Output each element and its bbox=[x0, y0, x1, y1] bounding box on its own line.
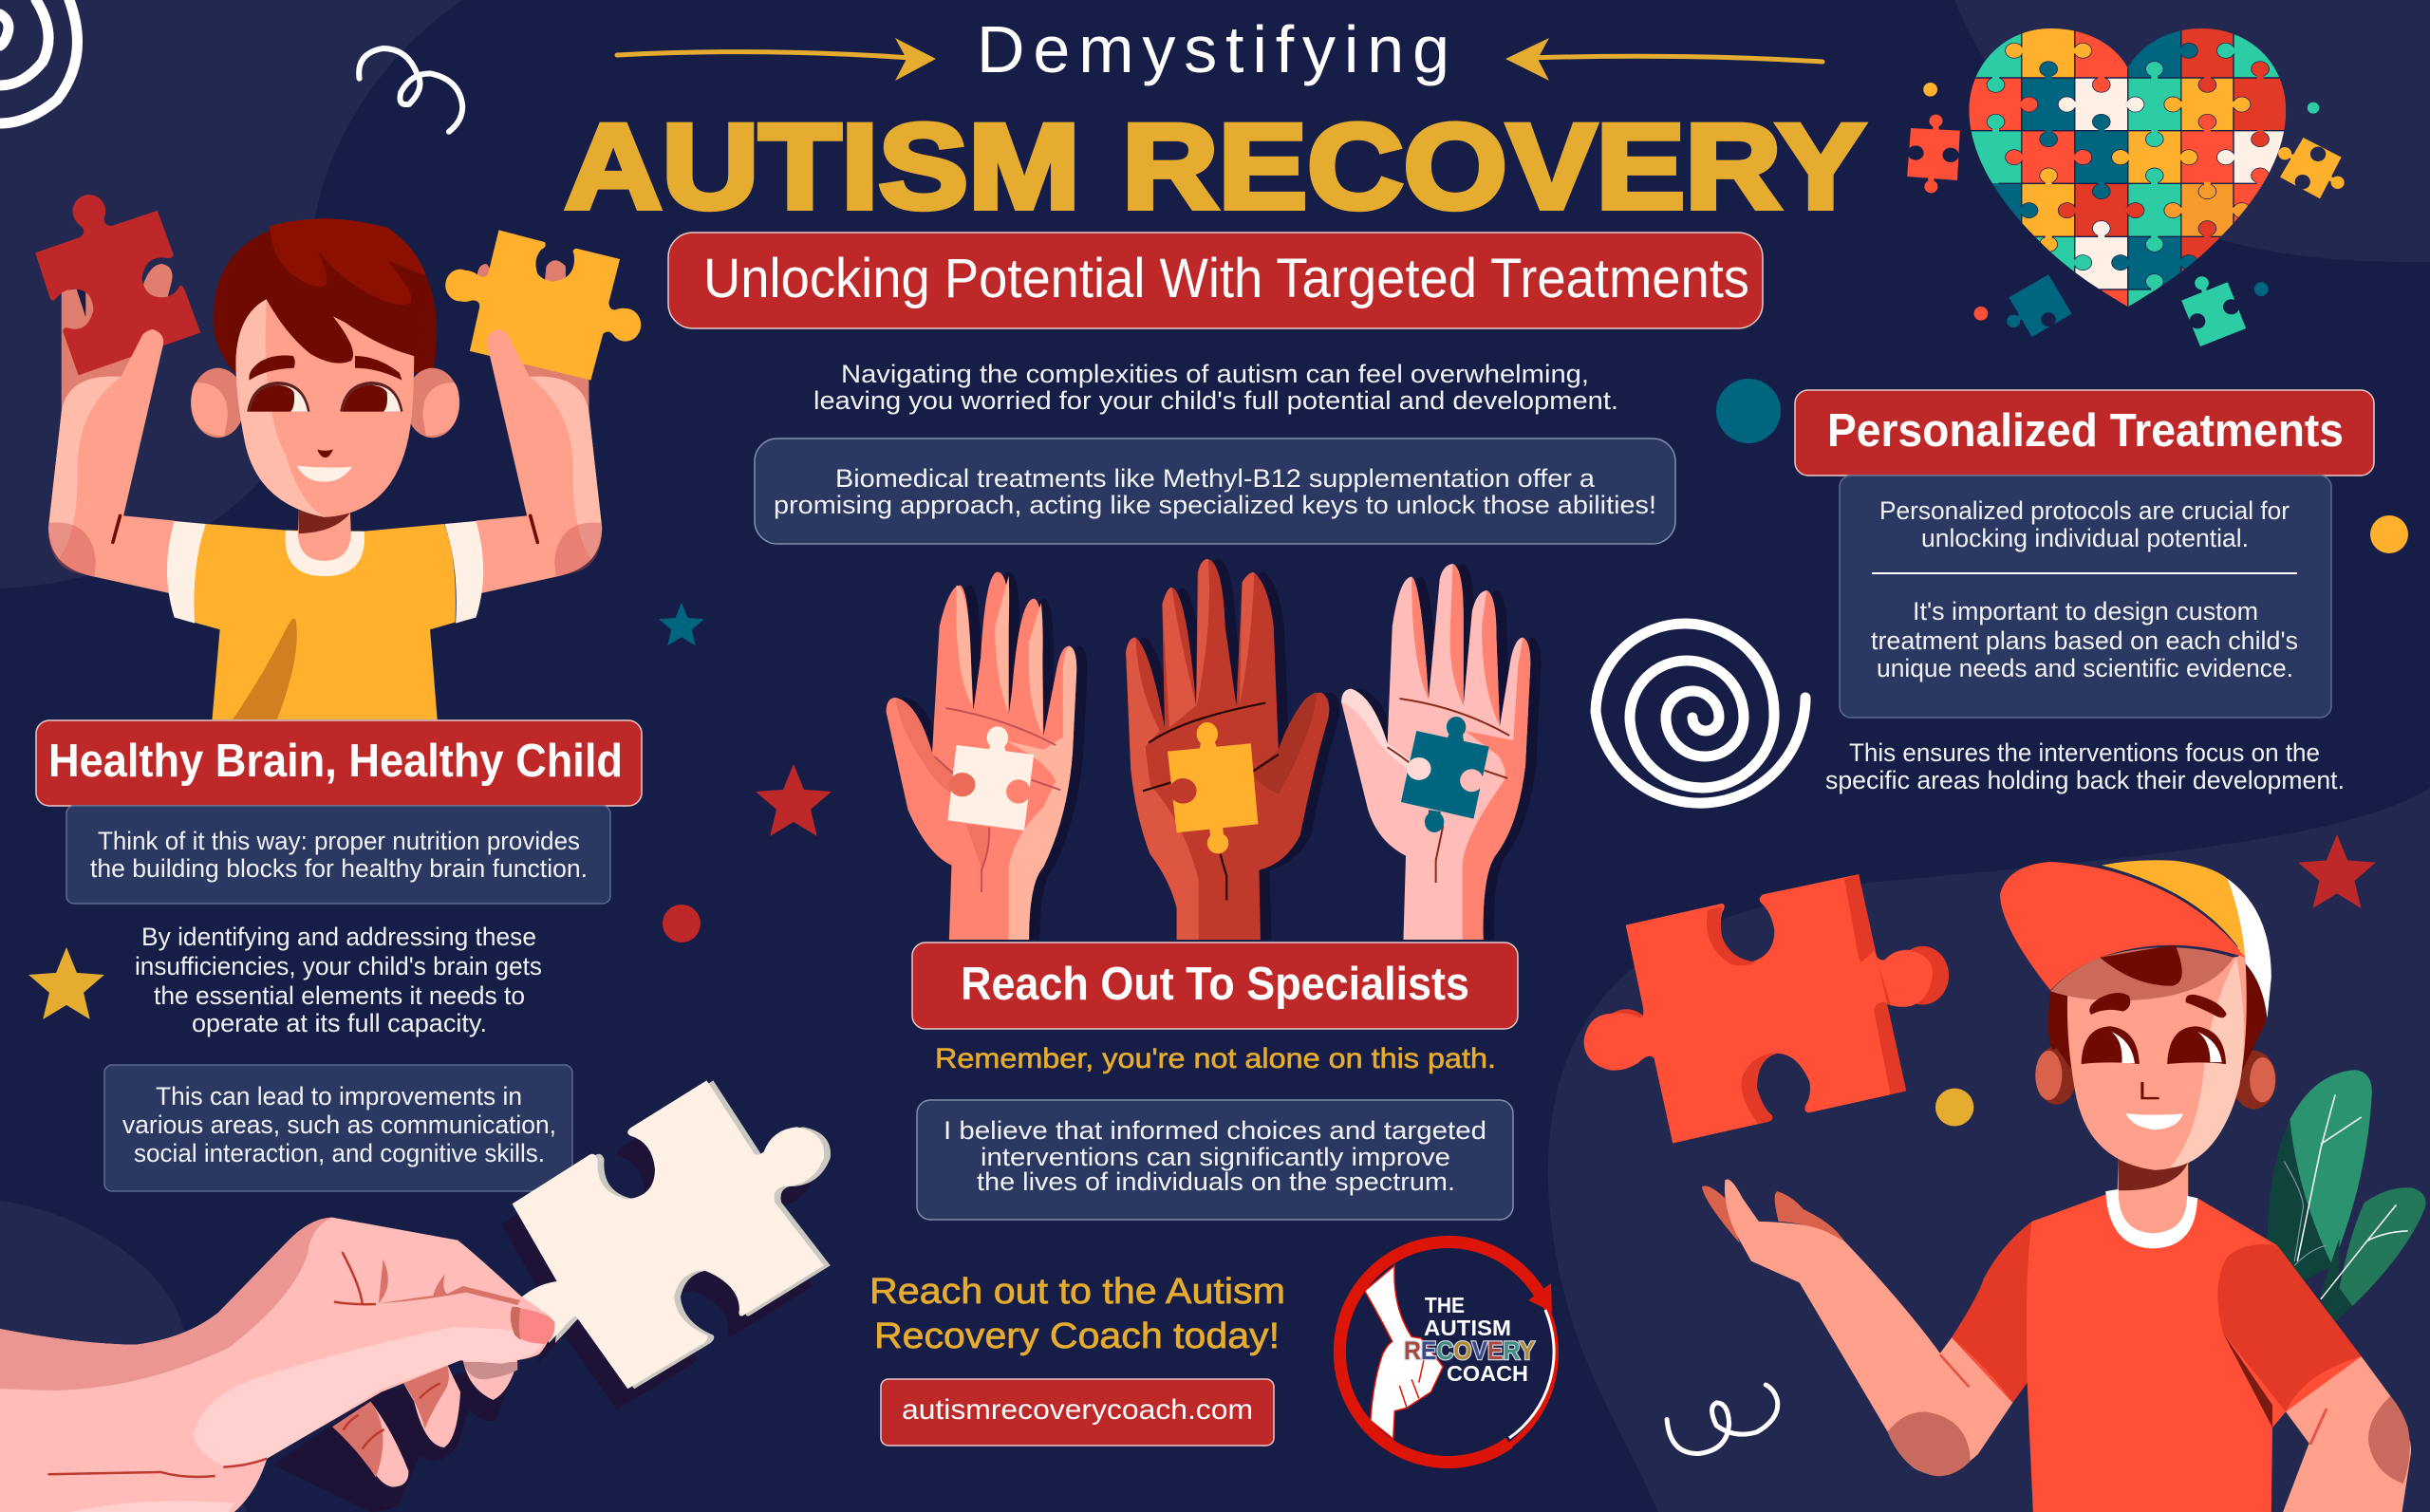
finger shadow bbox=[272, 1360, 517, 1512]
heading panel: Healthy Brain, Healthy Child bbox=[36, 720, 642, 806]
intro text: Navigating the complexities of autism can feel overwhelming, bbox=[841, 360, 1589, 388]
website button bbox=[881, 1379, 1274, 1446]
logo: The Autism Recovery Coach: RECOVERY bbox=[1404, 1336, 1535, 1365]
gold dot bbox=[1935, 1089, 1973, 1126]
panel: biomedical treatments: Biomedical treatments like Methyl-B12 supplementation offer a bbox=[835, 464, 1596, 493]
logo: The Autism Recovery Coach: THE bbox=[1425, 1293, 1465, 1317]
illustration: boy holding puzzle pieces bbox=[35, 195, 641, 719]
puzzle heart bbox=[1907, 28, 2345, 346]
text block: focus of interventions bbox=[1825, 738, 2345, 794]
call to action text bbox=[869, 1272, 1285, 1356]
heading panel: Reach Out To Specialists bbox=[912, 943, 1518, 1029]
text block: identifying insufficiencies: the essential elements it needs to bbox=[154, 981, 525, 1010]
loose puzzle piece: blue bbox=[2007, 274, 2072, 337]
decoration: gold circle bbox=[2370, 515, 2408, 553]
subtitle banner: Unlocking Potential With Targeted Treatments bbox=[703, 248, 1749, 309]
panel: improvements: social interaction, and cognitive skills. bbox=[134, 1139, 545, 1167]
yellow puzzle piece bbox=[445, 230, 641, 381]
text block: focus of interventions: specific areas holding back their development. bbox=[1825, 766, 2345, 794]
panel: nutrition: the building blocks for healthy brain function. bbox=[90, 854, 588, 883]
panel: improvements bbox=[104, 1065, 572, 1191]
floating puzzle piece bbox=[1584, 874, 1949, 1143]
head and cap bbox=[2000, 860, 2276, 1170]
website button: autismrecoverycoach.com bbox=[902, 1394, 1253, 1426]
loose puzzle piece: orange bbox=[1907, 115, 1960, 193]
title arrow left bbox=[617, 38, 936, 81]
heart tiles bbox=[1969, 28, 2286, 308]
hand three bbox=[1341, 564, 1541, 940]
subtitle banner bbox=[668, 233, 1763, 328]
panel: personalized protocols bbox=[1840, 476, 2331, 718]
text: Remember: Remember, you're not alone on this path. bbox=[935, 1043, 1496, 1074]
head bbox=[191, 218, 459, 517]
back fingers left bbox=[62, 289, 145, 417]
red puzzle piece bbox=[35, 195, 200, 375]
hand two bbox=[1126, 559, 1340, 940]
panel: nutrition: Think of it this way: proper nutrition provides bbox=[98, 827, 580, 855]
text block: identifying insufficiencies: By identifying and addressing these bbox=[141, 923, 536, 951]
logo: The Autism Recovery Coach bbox=[1339, 1241, 1556, 1462]
right forearm bbox=[2283, 1356, 2411, 1512]
text block: identifying insufficiencies bbox=[135, 923, 542, 1037]
logo: The Autism Recovery Coach: COACH bbox=[1447, 1361, 1528, 1386]
decoration: red circle bbox=[663, 905, 701, 943]
panel: informed choices: interventions can significantly improve bbox=[981, 1143, 1450, 1171]
title: Demystifying: Demystifying bbox=[977, 12, 1449, 86]
call to action text: Recovery Coach today! bbox=[874, 1316, 1280, 1356]
heading panel: Personalized Treatments: Personalized Treatments bbox=[1827, 405, 2344, 457]
red shirt bbox=[1952, 1195, 2362, 1512]
back fingers right bbox=[509, 359, 589, 417]
panel: personalized protocols: treatment plans based on each child's bbox=[1871, 626, 2298, 655]
neck and collar bbox=[286, 509, 364, 576]
hand one bbox=[887, 572, 1087, 940]
star: gold bbox=[28, 947, 104, 1019]
panel: biomedical treatments bbox=[755, 439, 1675, 544]
heading panel: Healthy Brain, Healthy Child: Healthy Brain, Healthy Child bbox=[48, 736, 623, 787]
intro text bbox=[813, 360, 1618, 415]
decoration: top squiggle bbox=[359, 48, 462, 132]
title arrow right bbox=[1505, 38, 1822, 81]
yellow shirt bbox=[167, 521, 483, 719]
left arm bbox=[1702, 1180, 2012, 1476]
panel: informed choices: the lives of individuals on the spectrum. bbox=[977, 1167, 1455, 1196]
loose puzzle piece: gold bbox=[2278, 138, 2345, 198]
puzzle piece bbox=[501, 1080, 831, 1409]
decoration: corner spiral bbox=[0, 0, 77, 123]
panel: improvements: various areas, such as communication, bbox=[122, 1111, 556, 1139]
panel: informed choices bbox=[917, 1100, 1513, 1220]
star: teal bbox=[659, 603, 704, 645]
heading panel: Personalized Treatments bbox=[1795, 390, 2374, 476]
star: red right bbox=[2298, 834, 2376, 908]
fingers bbox=[332, 1360, 517, 1487]
panel: personalized protocols: unique needs and scientific evidence. bbox=[1877, 654, 2293, 682]
star: red bbox=[756, 764, 832, 836]
decoration: teal circle bbox=[1716, 379, 1781, 443]
right arm bbox=[477, 329, 602, 593]
illustration: boy in cap with floating puzzle piece bbox=[1584, 860, 2426, 1512]
text block: identifying insufficiencies: insufficiencies, your child's brain gets bbox=[135, 952, 542, 980]
panel: biomedical treatments: promising approach, acting like specialized keys to unlock those abilities! bbox=[774, 491, 1656, 519]
panel: personalized protocols: It's important to design custom bbox=[1913, 597, 2258, 625]
leaves bbox=[2268, 1070, 2426, 1324]
panel: personalized protocols: Personalized protocols are crucial for bbox=[1879, 496, 2290, 525]
title: Autism Recovery bbox=[565, 99, 1865, 233]
neck and collar bbox=[2105, 1158, 2197, 1248]
panel: informed choices: I believe that informed choices and targeted bbox=[944, 1116, 1486, 1145]
panel: improvements: This can lead to improvements in bbox=[156, 1082, 522, 1111]
panel: nutrition bbox=[66, 806, 610, 904]
illustration: hand holding puzzle piece bbox=[0, 1080, 831, 1512]
loose puzzle piece: teal bbox=[2181, 276, 2246, 346]
logo: The Autism Recovery Coach: AUTISM bbox=[1424, 1316, 1511, 1340]
arm and palm bbox=[0, 1218, 554, 1512]
illustration: three hands with puzzle pieces bbox=[887, 559, 1541, 940]
title: Autism Recovery: AUTISM bbox=[565, 99, 1080, 233]
bottom squiggle bbox=[1667, 1385, 1778, 1453]
intro text: leaving you worried for your child's full potential and development. bbox=[813, 386, 1618, 415]
call to action text: Reach out to the Autism bbox=[869, 1272, 1285, 1312]
panel: personalized protocols: unlocking individual potential. bbox=[1921, 524, 2249, 552]
left arm bbox=[48, 329, 175, 593]
heart dots bbox=[1923, 83, 2319, 321]
text block: focus of interventions: This ensures the interventions focus on the bbox=[1849, 738, 2320, 767]
title: Autism Recovery: RECOVERY bbox=[1122, 99, 1865, 233]
text block: identifying insufficiencies: operate at its full capacity. bbox=[192, 1009, 487, 1037]
decoration: large spiral bbox=[1596, 624, 1805, 803]
heading panel: Reach Out To Specialists: Reach Out To Specialists bbox=[961, 959, 1469, 1010]
